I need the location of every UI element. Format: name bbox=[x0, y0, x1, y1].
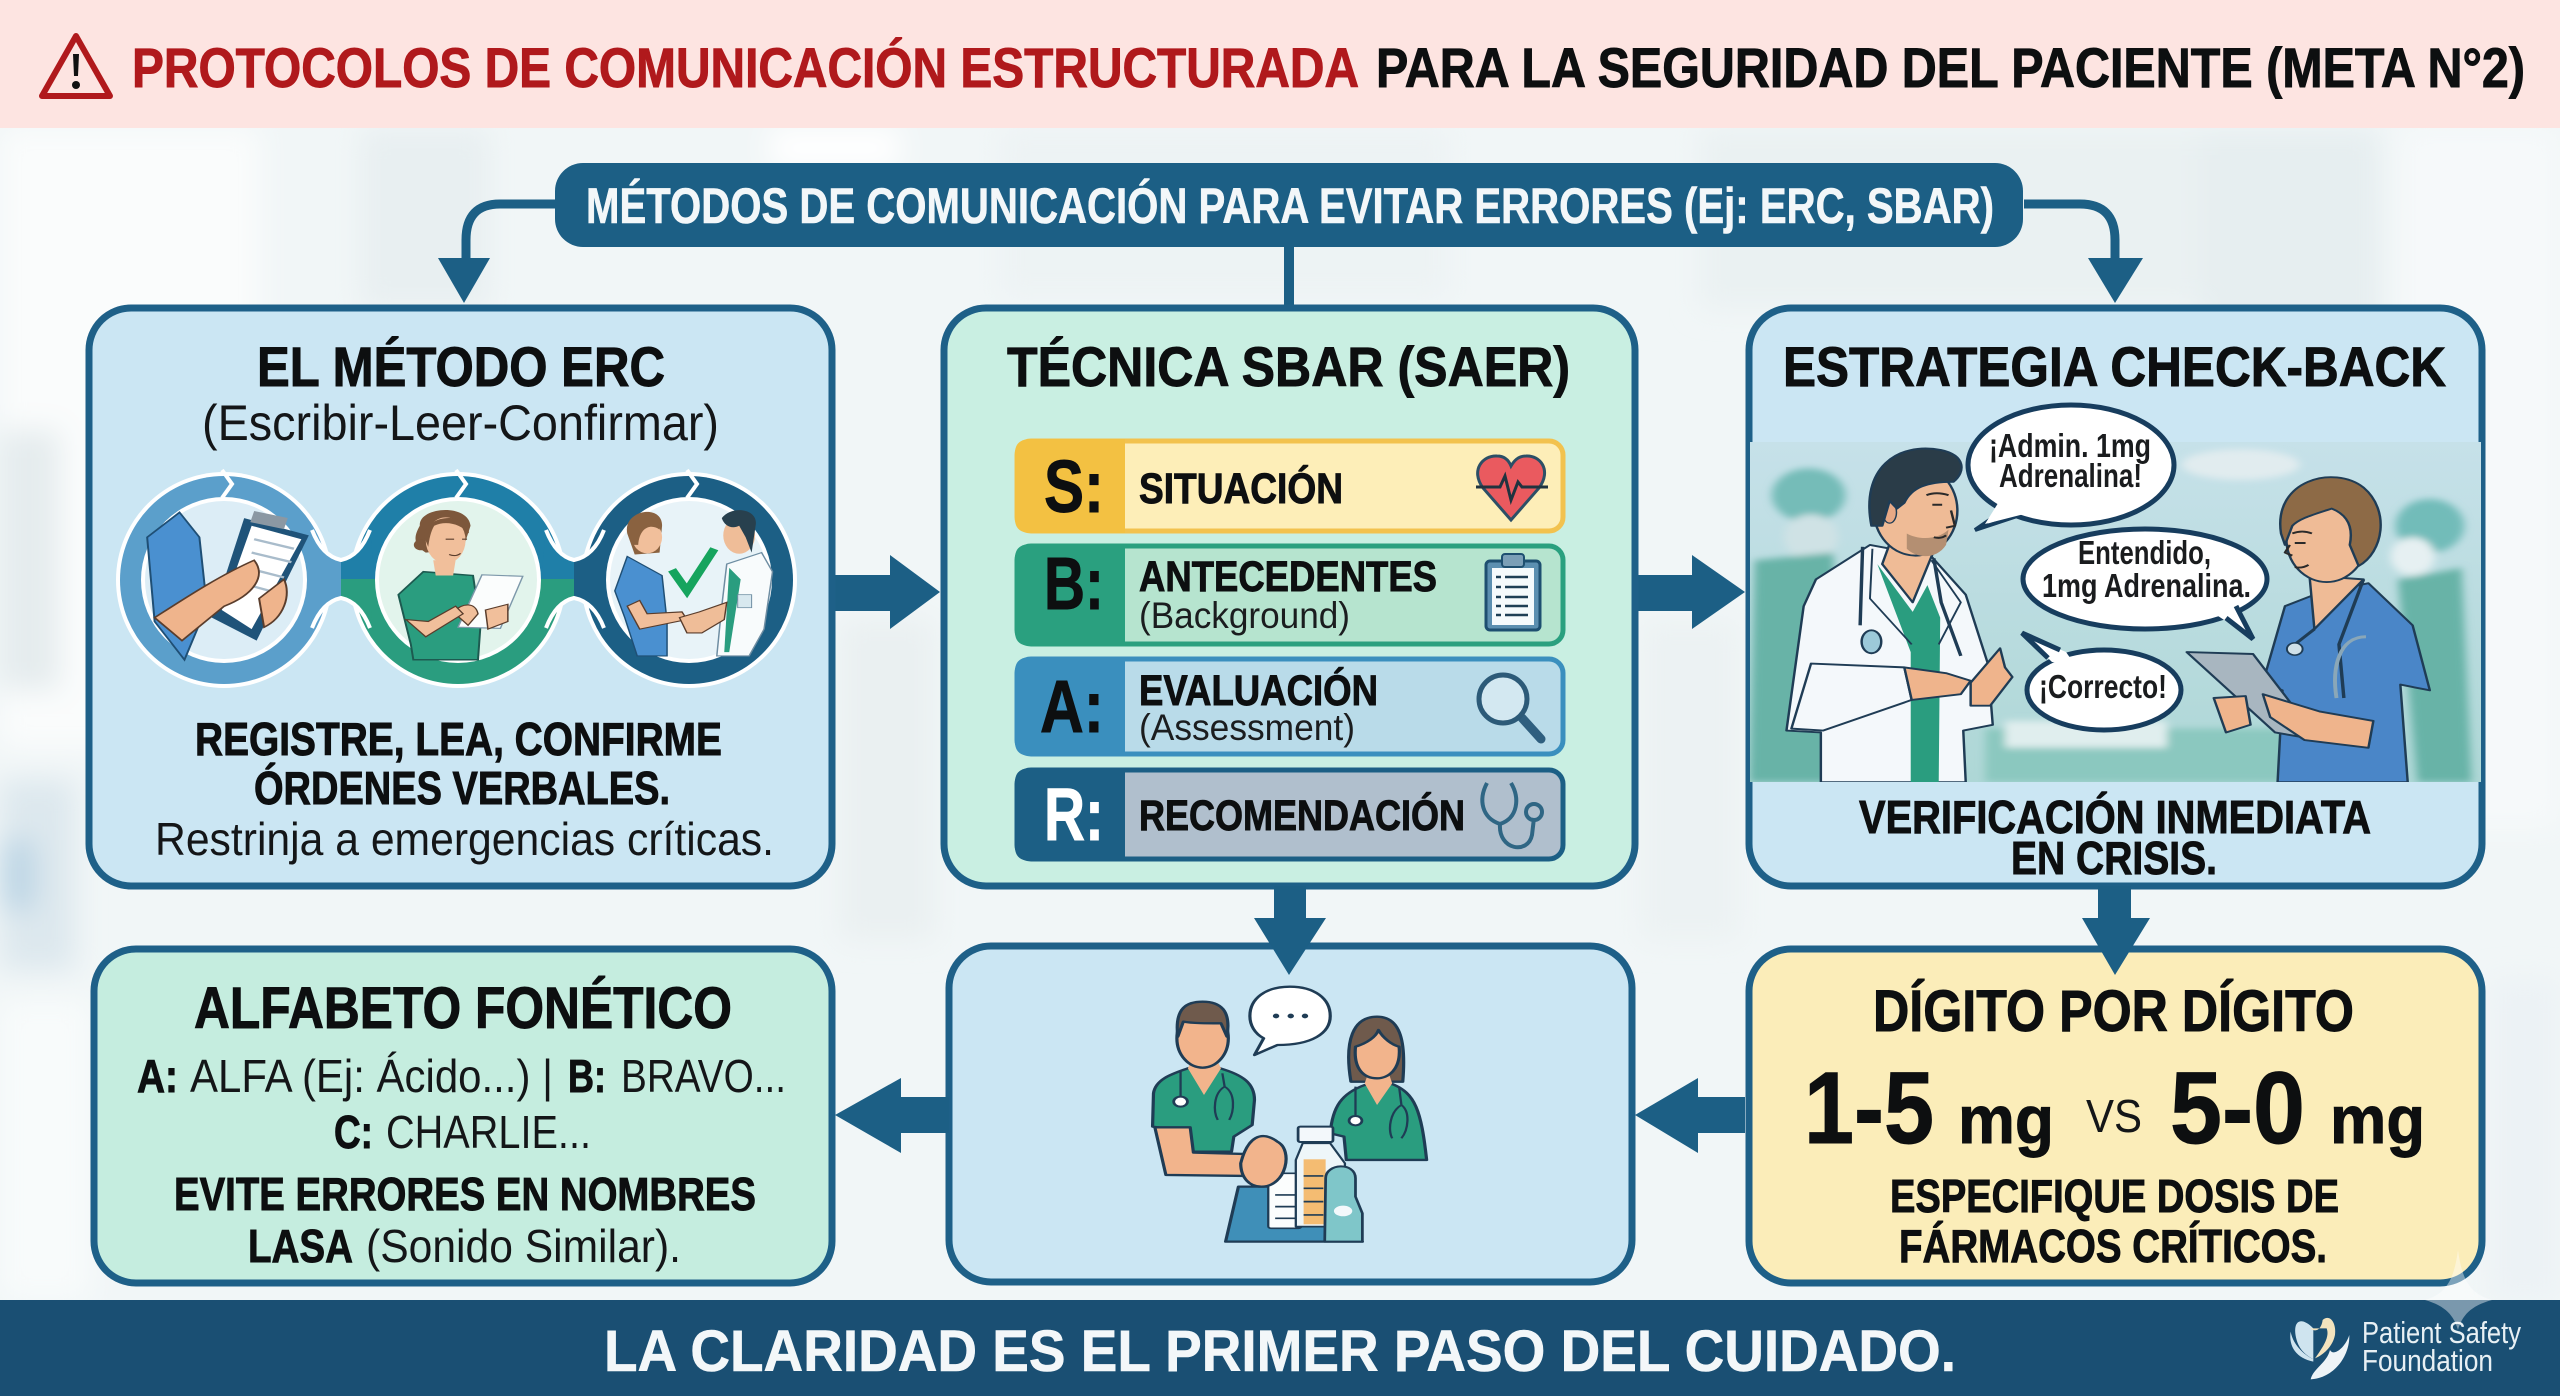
arrow: SBAR down to team panel bbox=[1254, 886, 1326, 975]
body text: registre lea confirme bbox=[155, 713, 774, 865]
chain of three circles bbox=[116, 470, 797, 688]
footer slogan: LA CLARIDAD ES EL PRIMER PASO DEL CUIDADO. bbox=[604, 1319, 1956, 1384]
banner: métodos de comunicación: MÉTODOS DE COMUNICACIÓN PARA EVITAR ERRORES (Ej: ERC, SBAR) bbox=[586, 178, 1994, 234]
table bbox=[1226, 1187, 1362, 1242]
phonetic alphabet examples: B: bbox=[568, 1050, 606, 1102]
woman bbox=[1330, 1017, 1427, 1160]
subheading: escribir leer confirmar: (Escribir-Leer-Confirmar) bbox=[202, 395, 719, 451]
heading: el método ERC: EL MÉTODO ERC bbox=[257, 335, 665, 398]
arrow: dígito panel to team panel bbox=[1635, 1078, 1745, 1153]
nurse bbox=[2187, 477, 2430, 782]
small vial bbox=[1325, 1166, 1362, 1242]
row: S situación: SITUACIÓN bbox=[1139, 464, 1343, 513]
dose comparison: VS bbox=[2086, 1090, 2142, 1142]
speech bubble: admin 1mg: ¡Admin. 1mg bbox=[1989, 427, 2151, 464]
connectors between circles bbox=[312, 530, 604, 628]
row: A evaluación bbox=[1015, 657, 1563, 756]
connector arrows from banner bbox=[438, 204, 2143, 307]
banner: métodos de comunicación bbox=[555, 163, 2023, 247]
speech bubble: entendido: Entendido, bbox=[2078, 534, 2211, 571]
row: B antecedentes: B: bbox=[1044, 542, 1104, 625]
heading: técnica SBAR: TÉCNICA SBAR (SAER) bbox=[1007, 335, 1570, 398]
phonetic alphabet examples: A: bbox=[137, 1050, 178, 1102]
panel: método ERC bbox=[89, 308, 832, 886]
illustration: doctor and nurse in operating room bbox=[1750, 442, 2481, 782]
arrow: SBAR to check-back bbox=[1638, 555, 1745, 629]
panel: técnica SBAR bbox=[944, 308, 1635, 886]
row: A evaluación: EVALUACIÓN bbox=[1139, 666, 1378, 715]
icon: clipboard bbox=[1486, 554, 1540, 630]
row: R recomendación: R: bbox=[1044, 773, 1104, 856]
icon: warning triangle bbox=[42, 36, 110, 96]
logo: patient safety foundation: Patient Safety bbox=[2362, 1315, 2521, 1350]
blurred background staff and equipment bbox=[1750, 449, 2472, 782]
panel: dígito por dígito bbox=[1749, 949, 2482, 1283]
phonetic alphabet examples: BRAVO... bbox=[621, 1050, 786, 1102]
title bbox=[132, 36, 2525, 99]
circle: write bbox=[116, 470, 332, 688]
icon: health workers with medication bbox=[1153, 987, 1427, 1242]
speech bubble: entendido bbox=[2023, 529, 2267, 639]
body text: especifique dosis: ESPECIFIQUE DOSIS DE bbox=[1890, 1170, 2339, 1222]
phonetic alphabet examples: CHARLIE... bbox=[386, 1106, 591, 1158]
icon: magnifier bbox=[1479, 675, 1541, 739]
heading: estrategia check-back: ESTRATEGIA CHECK-BACK bbox=[1783, 335, 2446, 398]
icon: heart with pulse bbox=[1476, 456, 1548, 520]
circle: confirm bbox=[581, 470, 797, 688]
panel: estrategia check-back bbox=[1749, 308, 2482, 886]
dose comparison: 5-0 bbox=[2170, 1051, 2305, 1165]
heading: alfabeto fonético: ALFABETO FONÉTICO bbox=[194, 976, 732, 1041]
hand bbox=[1241, 1136, 1286, 1187]
row: R recomendación: RECOMENDACIÓN bbox=[1139, 791, 1465, 840]
body text: evite errores: LASA bbox=[248, 1220, 353, 1272]
body text: especifique dosis: FÁRMACOS CRÍTICOS. bbox=[1899, 1220, 2327, 1272]
watermark: sparkle bbox=[2425, 1250, 2492, 1330]
doctor bbox=[1786, 449, 2012, 782]
row: A evaluación: (Assessment) bbox=[1139, 707, 1355, 748]
paper bbox=[1268, 1173, 1301, 1228]
heading: dígito por dígito: DÍGITO POR DÍGITO bbox=[1873, 979, 2354, 1044]
arrow: check-back down to dígito panel bbox=[2082, 886, 2150, 975]
man bbox=[1153, 1002, 1254, 1176]
row: S situación: S: bbox=[1044, 445, 1104, 528]
circle: read bbox=[350, 470, 566, 688]
row: B antecedentes bbox=[1015, 542, 1563, 646]
speech bubble: correcto: ¡Correcto! bbox=[2039, 668, 2167, 705]
body text: evite errores: (Sonido Similar). bbox=[366, 1220, 681, 1272]
dose comparison bbox=[1804, 1051, 2425, 1165]
row: S situación bbox=[1015, 439, 1563, 533]
body text: evite errores: EVITE ERRORES EN NOMBRES bbox=[174, 1168, 756, 1220]
dose comparison: mg bbox=[1958, 1082, 2054, 1158]
body text: registre lea confirme: Restrinja a emergencias críticas. bbox=[155, 813, 774, 865]
logo: patient safety foundation bbox=[2290, 1315, 2521, 1379]
speech bubble: admin 1mg bbox=[1968, 405, 2174, 530]
speech bubble: correcto bbox=[2022, 633, 2181, 730]
panel: alfabeto fonético bbox=[94, 949, 832, 1283]
body text: verificación inmediata: EN CRISIS. bbox=[2011, 832, 2217, 884]
speech bubble: admin 1mg: Adrenalina! bbox=[1999, 457, 2142, 494]
icon: stethoscope bbox=[1482, 783, 1542, 847]
body text: registre lea confirme: ÓRDENES VERBALES. bbox=[254, 762, 670, 814]
speech bubble with dots bbox=[1250, 987, 1330, 1055]
header band bbox=[0, 0, 2560, 128]
footer band bbox=[0, 1300, 2560, 1396]
body text: especifique dosis bbox=[1890, 1170, 2339, 1272]
speech bubble: entendido: 1mg Adrenalina. bbox=[2042, 567, 2251, 604]
body text: verificación inmediata bbox=[1859, 791, 2371, 884]
body text: evite errores bbox=[174, 1168, 756, 1272]
body text: registre lea confirme: REGISTRE, LEA, CONFIRME bbox=[195, 713, 722, 765]
bottle bbox=[1296, 1127, 1345, 1227]
row: R recomendación bbox=[1015, 768, 1563, 861]
phonetic alphabet examples bbox=[137, 1050, 786, 1158]
arrow: ERC to SBAR bbox=[835, 555, 940, 629]
phonetic alphabet examples: ALFA (Ej: Ácido...) | bbox=[190, 1050, 553, 1102]
dose comparison: mg bbox=[2330, 1082, 2425, 1158]
body text: verificación inmediata: VERIFICACIÓN INMEDIATA bbox=[1859, 791, 2371, 843]
dose comparison: 1-5 bbox=[1804, 1051, 1934, 1165]
row: B antecedentes: ANTECEDENTES bbox=[1139, 553, 1437, 601]
phonetic alphabet examples: C: bbox=[334, 1106, 373, 1158]
row: B antecedentes: (Background) bbox=[1139, 595, 1350, 636]
panel: central team illustration bbox=[949, 946, 1632, 1282]
title: PROTOCOLOS DE COMUNICACIÓN ESTRUCTURADA bbox=[132, 36, 1359, 99]
row: A evaluación: A: bbox=[1040, 665, 1104, 748]
icon: heart in hands bbox=[2290, 1318, 2349, 1379]
logo: patient safety foundation: Foundation bbox=[2362, 1343, 2493, 1378]
arrow: team panel to alfabeto bbox=[835, 1078, 949, 1153]
